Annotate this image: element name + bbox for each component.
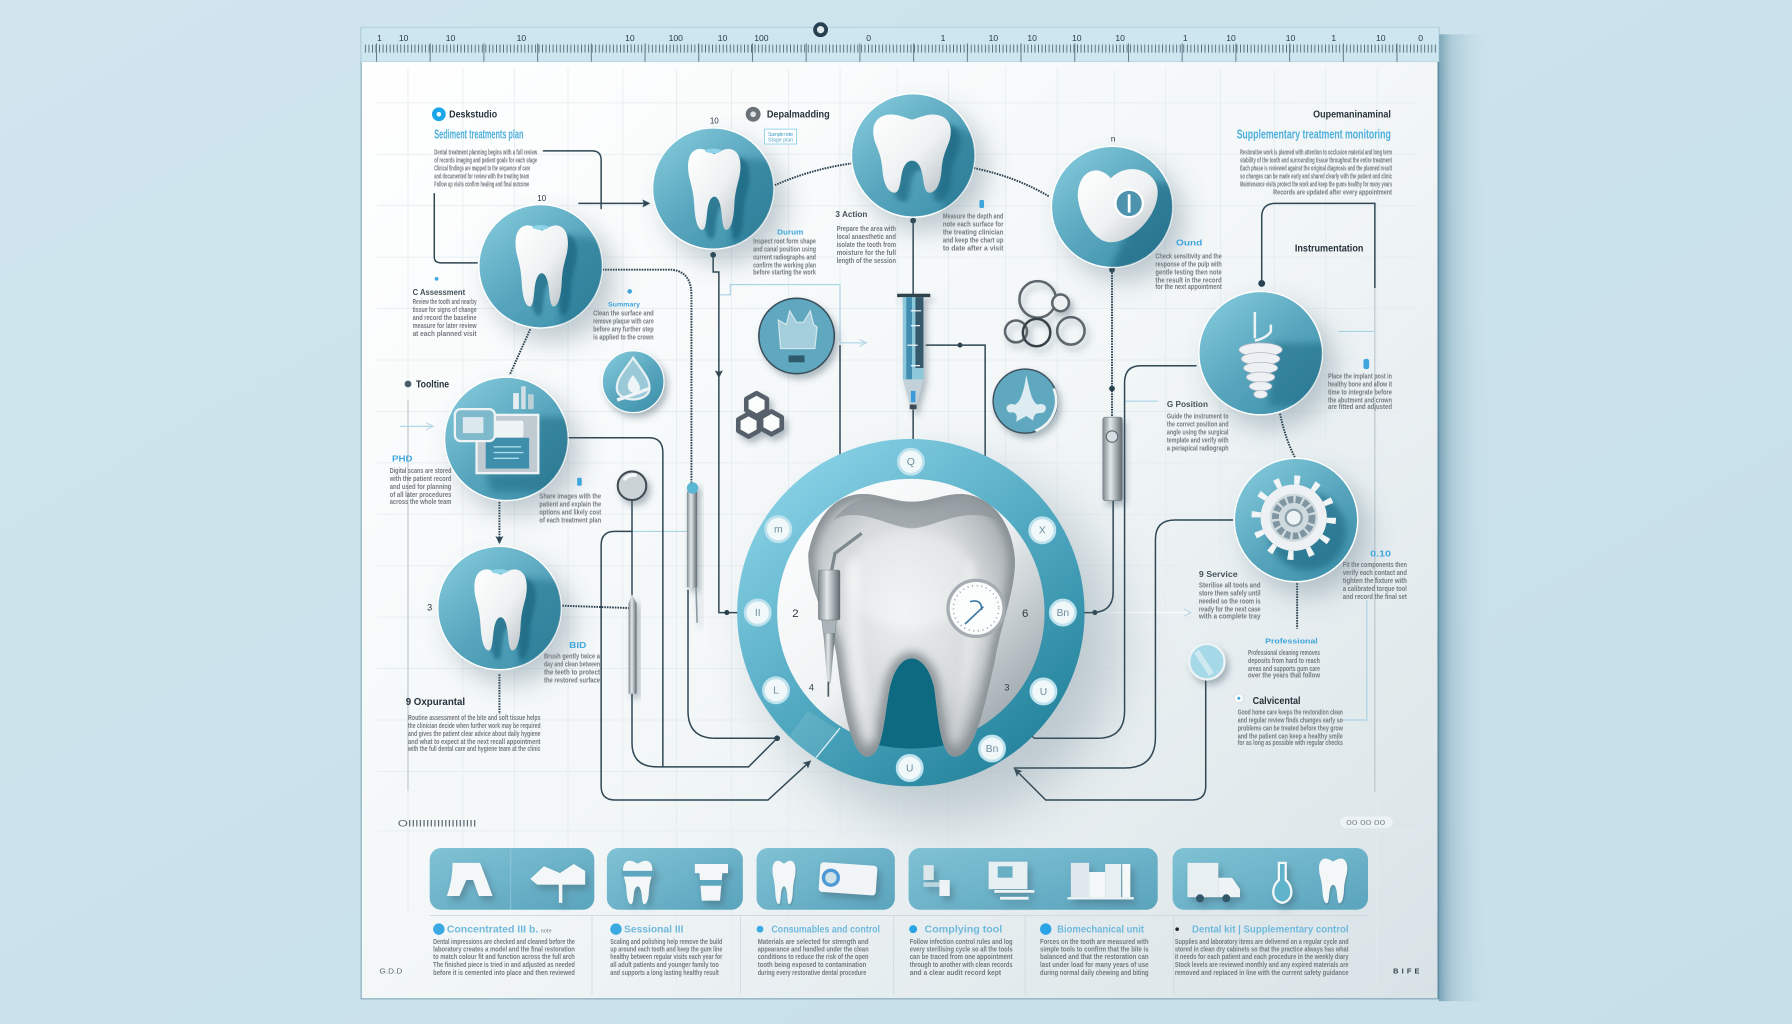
text block: magnifier right: over the years that follow <box>1248 671 1320 680</box>
connector: label to tooth 1 <box>434 193 478 263</box>
text block: gear left: Sterilise all tools and <box>1199 580 1261 589</box>
ring numbers: 3 <box>1004 682 1009 692</box>
text block: tooth 1 right: is applied to the crown <box>593 332 654 341</box>
thin guide lines <box>408 286 1375 792</box>
text block: tooth 4: for the next appointment <box>1155 282 1222 291</box>
panel: bottom icons 2 <box>607 848 743 910</box>
ring numbers: 2 <box>792 608 799 620</box>
ruler <box>361 27 1439 62</box>
text block: gear left: ready for the next case <box>1199 604 1261 613</box>
text block: magnifier right: Professional cleaning removes <box>1248 648 1320 657</box>
ruler: 10 <box>1376 33 1386 43</box>
icon: striped tooth <box>622 861 654 904</box>
text column 5: Forces on the tooth are measured with <box>1040 937 1149 946</box>
text block: tooth 8 right <box>544 641 601 684</box>
icon: probe tool <box>687 482 698 623</box>
text block: tooth 3 right: the treating clinician <box>943 227 1004 236</box>
footer code right: B I F E <box>1393 967 1419 976</box>
connector: monitor to ring <box>568 438 663 767</box>
text block: tooth 2: and canal position using <box>753 244 816 253</box>
caption pill: lower right <box>1339 816 1393 829</box>
text block: implant right: time to integrate before <box>1328 387 1392 396</box>
text block: implant right: Place the implant post in <box>1328 371 1392 380</box>
text block: tooth 1 right: Clean the surface and <box>593 308 654 317</box>
text block: top right: so changes can be made early and shared clearly with the patient and clinic <box>1240 171 1392 180</box>
text block: gear right: tighten the fixture with <box>1343 576 1407 585</box>
text block: tooth 1 right: Summary <box>608 301 640 308</box>
text block: tooth 8 right: the teeth to protect <box>544 667 600 676</box>
connector: tooth 3 to 4 <box>974 168 1049 197</box>
text block: implant right: the abutment and crown <box>1328 395 1392 404</box>
text block: gear left: needed so the room is <box>1199 596 1261 605</box>
text block: tooth 3 right: Measure the depth and <box>943 211 1004 220</box>
text block: magnifier right: deposits from hard to reach <box>1248 656 1320 665</box>
panel: implant disc <box>1199 291 1331 415</box>
text block: tooth 3 left: local anaesthetic and <box>837 232 896 241</box>
icon: cup <box>695 864 728 901</box>
text block: tooth 4: Ound <box>1176 239 1202 248</box>
icon: truck <box>1187 863 1240 902</box>
ring node glyphs: U <box>1040 687 1047 698</box>
text column 5: last under load for many years of use <box>1040 960 1149 969</box>
icon: crown disc <box>759 298 834 374</box>
text block: top right: Restorative work is planned with attention to occlusion material and long term <box>1240 147 1392 156</box>
text block: tooth 8 right: the restored surface <box>544 675 600 684</box>
ruler: 0 <box>866 33 871 43</box>
text block: tooth 1 left <box>413 277 477 338</box>
icon: tooth <box>1319 859 1347 903</box>
node dots <box>710 218 1265 741</box>
heading: top left <box>432 107 497 121</box>
text block: tooth 2: before starting the work <box>753 267 817 276</box>
panel: tooth disc 3 <box>851 94 983 223</box>
text block: tooth 1 left: measure for later review <box>413 321 477 330</box>
text block: tooth 3 right: to date after a visit <box>943 243 1004 252</box>
text block: tooth 1 right <box>593 289 654 341</box>
ruler: 10 <box>1286 33 1295 43</box>
text block: monitor right: Share images with the <box>539 491 601 500</box>
text block: gear right: and record the final set <box>1343 592 1407 601</box>
text column 1 <box>433 923 575 977</box>
connector: arrow right of syringe <box>926 345 985 464</box>
connector: monitor to tooth 8 <box>498 499 500 543</box>
caption pill: lower right: 00 00 00 <box>1346 818 1385 827</box>
text block: tooth 4: gentle testing then note <box>1155 267 1222 276</box>
ring numbers: 6 <box>1022 608 1028 620</box>
text block: monitor left: and used for planning <box>390 482 452 491</box>
text block: tooth 8 lower: Routine assessment of the bite and soft tissue helps <box>408 713 541 722</box>
text column 1: note <box>541 929 552 935</box>
text block: gear left: with a complete tray <box>1198 611 1261 620</box>
text block: tooth 8 lower: with the full dental care and hygiene team at the clinic <box>407 744 541 753</box>
connector: down to ring left <box>719 377 743 613</box>
text column 6 <box>1175 925 1349 977</box>
icon: card <box>818 862 878 896</box>
arrow to tooth 2 <box>578 202 649 204</box>
panel: bottom icons 4 <box>909 848 1158 910</box>
text column 3: tooth being exposed to contamination <box>758 960 867 969</box>
text block: top right: Maintenance visits protect the work and keep the gums healthy for many years <box>1240 179 1392 188</box>
text block: monitor right: options and likely cost <box>539 507 602 516</box>
text column 3: appearance and handled under the clean <box>758 944 869 953</box>
text block: magnifier right <box>1248 636 1320 680</box>
text column 4: can be traced from one appointment <box>910 952 1013 961</box>
text column 4: every sterilising cycle so all the tools <box>910 944 1013 953</box>
ring nodes <box>745 449 1075 781</box>
tag: top centre: Sample note <box>768 132 793 138</box>
light blue accent lines <box>632 285 1375 720</box>
text block: gear right: verify each contact and <box>1343 568 1407 577</box>
text block: implant left: the correct position and <box>1167 419 1229 428</box>
text column 3: conditions to reduce the risk of the open <box>758 952 869 961</box>
icon: linked rings <box>1005 281 1085 346</box>
text column 4 <box>909 925 1013 977</box>
subheading: top right: Supplementary treatment monitoring <box>1237 126 1391 141</box>
text block: tooth 2: confirm the working plan <box>753 260 816 269</box>
heading: top centre: Depalmadding <box>767 110 830 121</box>
text column 1: Dental impressions are checked and cleaned before the <box>433 937 575 946</box>
white arrow right of ring <box>1093 612 1190 614</box>
icon: hexagon chain <box>738 393 782 437</box>
connector: probe to ring <box>688 590 777 738</box>
light arrow left <box>400 425 432 427</box>
text block: tooth 4: Check sensitivity and the <box>1155 251 1222 260</box>
text column 3: Consumables and control <box>771 925 880 936</box>
text block: monitor heading <box>405 379 450 390</box>
text block: monitor right <box>539 478 602 524</box>
text block: tooth 3 left <box>835 210 896 265</box>
ruler: 1 <box>1331 33 1336 43</box>
text column 2: healthy between regular visits each year for <box>610 952 722 961</box>
connector: tooth 2 down <box>713 255 719 377</box>
heading: top right: Oupemaninaminal <box>1313 110 1391 121</box>
connector: text to tooth 2 <box>543 151 601 209</box>
connector: tooth 1 to probe <box>602 270 691 487</box>
text block: tooth 8 lower: and what to expect at the next recall appointment <box>408 737 541 746</box>
ring numbers: 10 <box>537 194 547 203</box>
subheading: top left: Sediment treatments plan <box>434 126 523 141</box>
text block: gear left: 9 Service <box>1199 570 1238 579</box>
text block: tooth 3 right <box>943 200 1004 252</box>
text block: tooth 8 lower: 9 Oxpurantal <box>406 697 465 708</box>
text block: magnifier right: Professional <box>1265 636 1318 645</box>
panel: bottom icons 1 <box>430 848 594 910</box>
light arrow centre <box>840 342 865 344</box>
text block: lower right: problems can be treated before they grow <box>1238 723 1343 732</box>
text column 2: up around each tooth and keep the gum line <box>610 944 722 953</box>
icon: star disc <box>993 369 1057 433</box>
text block: tooth 3 left: 3 Action <box>835 210 868 219</box>
icon: tray <box>530 864 585 903</box>
text block: top left: Dental treatment planning begins with a full review <box>434 147 537 156</box>
text column 6: it needs for each patient and each procedure in the weekly diary <box>1175 952 1349 961</box>
ring node glyphs <box>755 457 1069 774</box>
ruler: 100 <box>669 33 683 43</box>
text block: tooth 8 lower: and gives the patient clear advice about daily hygiene <box>408 729 541 738</box>
text block: monitor left: PHD <box>392 455 413 464</box>
ruler: 10 <box>1115 33 1125 43</box>
ring numbers: 4 <box>809 682 814 692</box>
text block: lower right: and the patient can keep a healthy smile <box>1238 731 1343 740</box>
text column 6: stored in clean dry cabinets so that the practice always has what <box>1175 944 1349 953</box>
connector: gear to ring <box>1014 520 1233 768</box>
text column 1: to match colour fit and function across the full arch <box>433 952 575 961</box>
text block: tooth 8 right: BID <box>569 641 587 650</box>
connector: gear to text <box>1296 581 1298 629</box>
text block: top left: Clinical findings are mapped to the sequence of care <box>434 163 530 172</box>
ruler: 10 <box>1072 33 1082 43</box>
connector: syringe to ring <box>912 409 914 448</box>
text block: top left: of records imaging and patient goals for each stage <box>434 155 537 164</box>
ring node glyphs: X <box>1039 526 1046 537</box>
panel: tooth disc 2 <box>653 128 789 254</box>
panel: tooth disc 8 <box>438 546 577 674</box>
text block: implant right <box>1328 359 1392 411</box>
panel: bottom icons 3 <box>757 848 895 910</box>
text column 4: and a clear audit record kept <box>910 968 1002 977</box>
text block: top right <box>1240 147 1392 196</box>
connector: magnifier to ring <box>1015 680 1206 800</box>
text block: tooth 1 left: Review the tooth and nearby <box>413 297 477 306</box>
ring node glyphs: m <box>774 525 783 536</box>
ruler: 1 <box>377 33 382 43</box>
ruler: 10 <box>989 33 998 43</box>
ruler pin <box>813 22 828 37</box>
icon: tooth <box>772 861 796 904</box>
panel: tooth disc 1 <box>479 205 617 331</box>
text column 2 <box>610 923 723 977</box>
panel: gear disc <box>1234 458 1358 582</box>
ring node glyphs: Bn <box>1057 608 1069 619</box>
text block: gear right: Fit the components then <box>1343 560 1407 569</box>
text block: gear right: 0.10 <box>1370 550 1392 559</box>
text block: tooth 3 left: isolate the tooth from <box>837 240 896 249</box>
connector: arrow left of syringe <box>839 345 841 464</box>
icon: flask <box>1273 863 1291 903</box>
connector: tooth 8 to handpiece <box>562 606 629 608</box>
connector: tooth 4 to instrument <box>1111 270 1113 417</box>
text block: monitor heading: Tooltine <box>416 379 450 390</box>
text block: tooth 1 right: remove plaque with care <box>593 316 654 325</box>
text column 5: during normal daily chewing and biting <box>1040 968 1149 977</box>
text block: gear left <box>1198 570 1261 620</box>
heading: implant: Instrumentation <box>1295 243 1363 254</box>
ring numbers <box>427 116 1115 692</box>
text block: top left: Follow up visits confirm healing and final outcome <box>434 179 529 188</box>
ring node glyphs: II <box>755 608 761 619</box>
text block: monitor right: patient and explain the <box>539 499 601 508</box>
connector: tooth 8 to text <box>498 674 500 714</box>
ring node glyphs: Q <box>907 457 915 468</box>
panel: monitor disc <box>445 377 571 501</box>
ring node glyphs: L <box>773 686 779 697</box>
text block: lower right <box>1234 694 1343 747</box>
text block: tooth 8 right: day and clean between <box>544 659 600 668</box>
ruler: 10 <box>625 33 635 43</box>
ring node glyphs: U <box>906 763 913 774</box>
chart: central tooth ring <box>737 439 1085 786</box>
text block: tooth 1 left: tissue for signs of change <box>413 305 477 314</box>
text block: tooth 2: current radiographs and <box>753 252 816 261</box>
text block: implant left: a periapical radiograph <box>1167 443 1229 452</box>
text block: tooth 8 lower: the clinician decide when further work may be required <box>408 721 541 730</box>
text block: monitor left <box>389 455 452 506</box>
text block: tooth 3 left: length of the session <box>837 256 896 265</box>
text block: tooth 3 right: and keep the chart up <box>943 235 1004 244</box>
heading: top left: Deskstudio <box>449 110 497 121</box>
icon: right handpiece <box>1103 417 1122 501</box>
text block: gear right: a calibrated torque tool <box>1343 584 1407 593</box>
text block: tooth 3 left: moisture for the full <box>837 248 896 257</box>
ruler: 100 <box>754 33 769 43</box>
shadow: central ring <box>762 465 1117 819</box>
ring numbers: 3 <box>427 602 432 612</box>
icon: magnifier <box>1189 644 1225 679</box>
text block: tooth 1 left: C Assessment <box>413 288 465 297</box>
text block: implant left: angle using the surgical <box>1167 427 1229 436</box>
text block: gear left: store them safely until <box>1199 588 1261 597</box>
text block: implant right: are fitted and adjusted <box>1328 402 1392 411</box>
text block: implant left <box>1167 400 1229 452</box>
connector: instrument to ring <box>1080 501 1113 613</box>
connector: lower left long <box>601 531 810 800</box>
text block: tooth 4: the result in the record <box>1155 275 1222 284</box>
text block: lower right: Calvicental <box>1253 696 1301 707</box>
ruler: 10 <box>1027 33 1037 43</box>
text block: lower right: Good home care keeps the restoration clean <box>1238 707 1343 716</box>
text block: lower right: for as long as possible with regular checks <box>1238 738 1343 747</box>
text column 6: removed and replaced in line with the current safety guidance <box>1175 968 1349 977</box>
text column 2: and supports a long lasting healthy result <box>610 968 719 977</box>
text column 1: Concentrated III b. <box>447 925 539 936</box>
tag: top centre: Stage plan <box>768 138 793 144</box>
text column 5: Biomechanical unit <box>1057 925 1145 936</box>
icon: handle tool <box>629 594 637 694</box>
text block: monitor right: of each treatment plan <box>539 515 601 524</box>
big tooth <box>808 494 1015 757</box>
text column 3: during every restorative dental procedure <box>758 968 866 977</box>
caption: lower left: OIIIIIIIIIIIIIIIIIII <box>398 818 477 828</box>
text block: tooth 2: Durum <box>777 227 804 236</box>
text block: implant left: template and verify with <box>1167 435 1229 444</box>
text column 6: Dental kit | Supplementary control <box>1192 925 1349 936</box>
connector: implant to gear <box>1280 414 1295 457</box>
text block: magnifier right: areas and supports gum care <box>1248 664 1320 673</box>
text column 2: Sessional III <box>624 925 684 936</box>
text block: tooth 8 right: Brush gently twice a <box>544 651 601 660</box>
text block: tooth 3 right: note each surface for <box>943 219 1003 228</box>
text block: tooth 4 <box>1155 239 1222 291</box>
ring numbers: 10 <box>710 116 719 125</box>
connector: top right bracket to implant <box>1262 203 1375 288</box>
text block: monitor left: of all later procedures <box>390 490 451 499</box>
text block: monitor left: Digital scans are stored <box>390 466 452 475</box>
connector: mirror to ring <box>632 499 777 767</box>
icon: handpiece <box>818 533 862 697</box>
text block: implant right: healthy bone and allow it <box>1328 379 1392 388</box>
icon: instrument <box>923 865 950 896</box>
text block: top right: Each phase is reviewed against the original diagnosis and the planned result <box>1240 163 1392 172</box>
text column 6: Supplies and laboratory items are delivered on a regular cycle and <box>1175 937 1349 946</box>
ruler: 10 <box>446 33 455 43</box>
ruler: 10 <box>718 33 727 43</box>
text block: top right: Records are updated after every appointment <box>1273 187 1392 196</box>
text block: top left <box>434 147 537 188</box>
ruler: 10 <box>1226 33 1236 43</box>
text column 1: before it is cemented into place and then reviewed <box>433 968 575 977</box>
text column 4: through to another with clean records <box>910 960 1013 969</box>
connector: tooth 3 to syringe <box>912 221 914 295</box>
connector: implant to ring lower right <box>1006 366 1197 738</box>
icon: supply boxes <box>1067 863 1134 899</box>
ring node glyphs: Bn <box>986 744 999 755</box>
text block: gear right <box>1343 550 1407 601</box>
text column 6: Stock levels are reviewed monthly and any expired materials are <box>1175 960 1349 969</box>
dividers: bottom columns <box>430 915 1368 994</box>
text block: monitor left: across the whole team <box>390 497 452 506</box>
text block: top left: and documented for review with the treating team <box>434 171 529 180</box>
text block: tooth 1 right: before any further step <box>593 324 654 333</box>
ruler: 1 <box>941 33 946 43</box>
footer code left: G.D.D <box>379 967 402 976</box>
ruler: 0 <box>1418 33 1423 43</box>
text column 4: Complying tool <box>925 925 1003 936</box>
text block: tooth 1 left: at each planned visit <box>413 329 477 338</box>
icon: water drop disc <box>602 351 664 413</box>
icon: syringe <box>897 294 930 409</box>
panel: tooth disc 4 with probe badge <box>1051 146 1183 274</box>
connector: ring stub <box>911 478 913 495</box>
text column 5: simple tools to confirm that the bite is <box>1040 944 1149 953</box>
text column 5 <box>1040 923 1149 977</box>
icon: dental mirror <box>618 471 646 500</box>
ruler: 10 <box>517 33 526 43</box>
text column 4: Follow infection control rules and log <box>910 937 1013 946</box>
connector: tooth 2 to 3 <box>775 163 851 185</box>
text column 1: laboratory creates a model and the final restoration <box>433 944 575 953</box>
text block: tooth 2 <box>753 227 817 276</box>
icon: device <box>989 862 1034 898</box>
text column 1: The finished piece is tried in and adjusted as needed <box>433 960 575 969</box>
text block: tooth 1 left: and record the baseline <box>413 313 477 322</box>
text block: top right: stability of the tooth and surrounding tissue throughout the entire treatment <box>1240 155 1392 164</box>
paper sheet <box>361 27 1489 1001</box>
text column 2: Scaling and polishing help remove the build <box>610 937 723 946</box>
connector: tooth 1 to monitor <box>510 329 530 375</box>
tag: top centre <box>765 129 797 144</box>
text block: tooth 2: Inspect root form shape <box>753 236 816 245</box>
icon: molar <box>447 863 493 896</box>
text block: tooth 3 left: Prepare the area with <box>837 224 896 233</box>
text column 2: all adult patients and younger family too <box>610 960 719 969</box>
text block: lower right: and regular review finds changes early so <box>1238 715 1343 724</box>
ring numbers: n <box>1111 135 1115 144</box>
panel: bottom icons 5 <box>1173 848 1368 910</box>
heading: top centre <box>746 107 830 122</box>
text block: implant left: Guide the instrument to <box>1167 411 1229 420</box>
ruler: 1 <box>1183 33 1188 43</box>
ruler: 10 <box>399 33 409 43</box>
text block: tooth 4: response of the pulp with <box>1155 259 1222 268</box>
text column 5: balanced and that the restoration can <box>1040 952 1149 961</box>
text column 3: Materials are selected for strength and <box>758 937 869 946</box>
text column 3 <box>757 925 880 977</box>
text block: implant left: G Position <box>1167 400 1208 409</box>
icon: gauge dial <box>948 580 1004 636</box>
text block: tooth 8 lower <box>406 697 541 753</box>
text block: monitor left: with the patient record <box>389 474 452 483</box>
